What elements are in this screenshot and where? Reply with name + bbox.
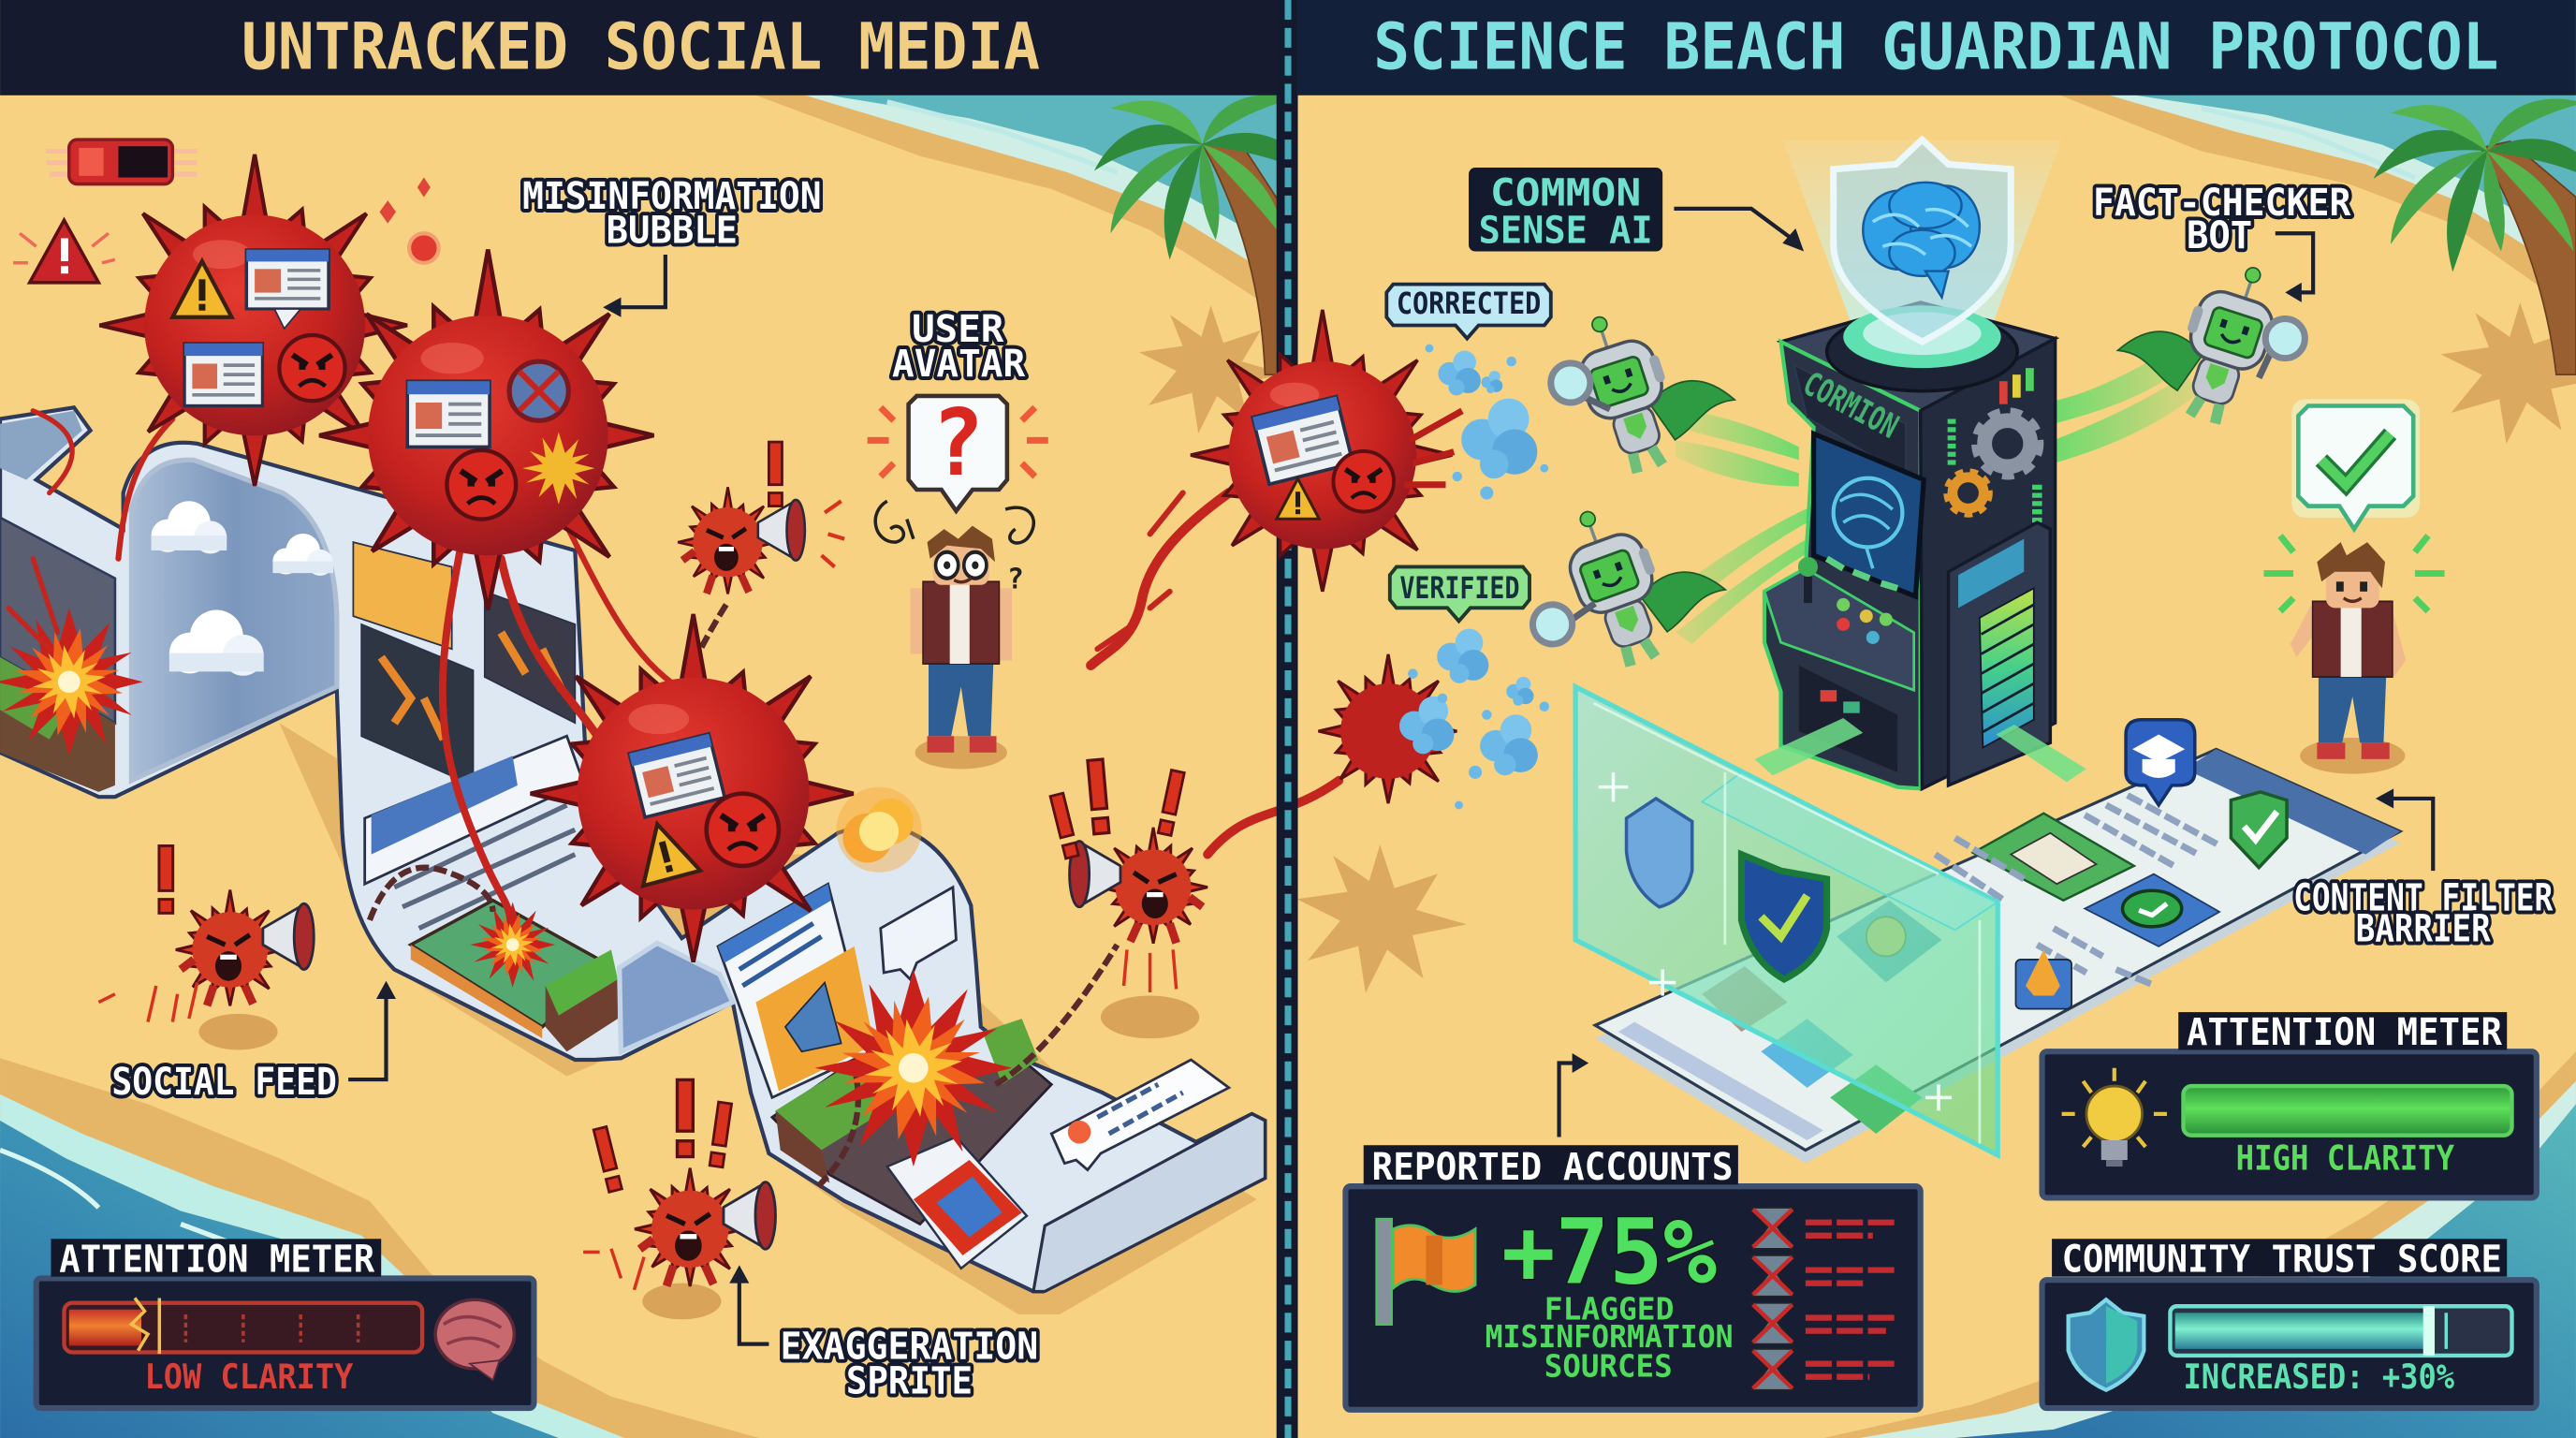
question bubble: ? [931,390,984,497]
barrier blue shield [1627,799,1692,907]
tab label: REPORTED ACCOUNTS [1372,1145,1734,1189]
tablet text lines [1935,795,2217,986]
ribbon front lip [1033,1114,1265,1291]
label: content filter barrier: BARRIER [2356,907,2491,951]
beach: right bottom water [1823,1051,2576,1438]
content tablet [1595,720,2400,1164]
battery icon [46,139,198,184]
holo ring base [1827,305,2017,391]
label: common sense ai: COMMON [1490,170,1641,214]
increased text: INCREASED: +30% [2183,1357,2454,1397]
barrier sparkles [1599,772,1952,1110]
question bubble [868,390,1048,511]
ribbon left card with explosion [0,411,143,792]
machine control panel [1764,557,1914,690]
ribbon cards on the wall [353,542,611,1038]
arcade machine [1764,302,2056,788]
label: misinformation bubble: MISINFORMATION [522,174,822,218]
machine marquee: CORMION [1796,364,1905,447]
tab [2178,1012,2507,1049]
tablet thumbs icon [2015,949,2071,1009]
label: user avatar [892,307,1026,386]
explosion on ribbon [470,902,555,988]
flagged sources text: FLAGGED [1544,1290,1674,1327]
flag icon [1377,1219,1475,1325]
main explosion [815,969,1012,1167]
divider [1277,0,1298,1438]
misinformation bubble 4 [1191,310,1462,592]
panel header right [1298,0,2576,95]
label: content filter barrier [2293,875,2554,951]
user avatar (happy) [2291,542,2406,759]
arrow: reported accounts [1559,1053,1588,1137]
social feed ribbon [0,407,1265,1291]
label: misinformation bubble [522,174,822,253]
arrow: misinformation bubble [603,255,666,317]
arrow: common sense ai [1674,209,1804,252]
label: fact-checker bot: FACT-CHECKER [2093,181,2351,225]
trust bar [2170,1306,2511,1356]
brain icon [435,1299,514,1380]
beach: left bottom water [0,1058,759,1438]
label: common sense ai [1469,168,1662,253]
ribbon second arch [620,943,733,1051]
ribbon arch back wall with clouds [131,460,337,781]
small red decorations [379,178,439,263]
tablet blue check card [2085,874,2219,946]
corrected callout [1386,285,1551,339]
ribbon grass block [546,949,618,1051]
machine screen [1814,433,1924,596]
tab label: ATTENTION METER [2187,1010,2503,1054]
palm tree left [1094,95,1277,375]
dissolving bubble 5 [1319,654,1456,803]
crossed account list [1751,1208,1897,1390]
high bar [2183,1086,2511,1136]
blue particles verified [1408,629,1549,809]
low clarity text: LOW CLARITY [145,1357,354,1397]
flagged sources text: SOURCES [1544,1348,1673,1385]
sprite with megaphone, top [678,442,844,594]
barrier green shield [1741,855,1827,979]
flagged sources text: MISINFORMATION [1486,1318,1734,1355]
ribbon speech bubble [881,888,956,979]
misinformation bubble 1 [99,154,407,486]
ribbon blue image card [887,1137,1027,1269]
palm tree right [2374,99,2576,374]
blue particles corrected [1426,345,1548,500]
corrected callout: CORRECTED [1397,287,1541,321]
label: social feed: SOCIAL FEED [111,1060,337,1104]
attention warning triangle [13,220,115,283]
arrow: fact-checker bot [2276,233,2313,302]
shield icon [2069,1299,2144,1390]
fact-checker bot left bottom [1526,477,1739,674]
label: exaggeration sprite: SPRITE [846,1358,973,1402]
fire burst [836,787,922,873]
tab label: ATTENTION METER [59,1237,375,1281]
tendrils [8,411,1339,945]
machine marquee [1794,364,1906,477]
label: user avatar: AVATAR [892,342,1026,386]
user avatar (confused) [910,526,1012,753]
bulb icon [2062,1068,2167,1167]
flagged sources text [1486,1290,1734,1385]
panel: reported accounts [1345,1145,1921,1410]
confusion squiggles: ? [1007,563,1024,595]
graduation map pin [2126,720,2195,805]
tab label: COMMUNITY TRUST SCORE [2062,1237,2502,1281]
ribbon crater and grass slab [772,1019,1051,1224]
label: fact-checker bot [2093,181,2351,257]
tablet book card [1973,814,2134,901]
machine LEDs and vents [1952,368,2037,529]
machine side panel [1949,522,2050,785]
panel: attention meter low [37,1237,534,1408]
verified callout: VERIFIED [1399,572,1519,606]
+75% figure: +75% [1501,1199,1717,1305]
hologram beam [1782,139,2062,337]
panel: community trust score [2042,1237,2537,1408]
sprite with megaphone, right [1050,759,1208,992]
label: exaggeration sprite: EXAGGERATION [781,1324,1038,1368]
high clarity text: HIGH CLARITY [2236,1138,2455,1179]
sprite with megaphone, left [98,845,314,1022]
check bubble [2291,399,2420,529]
arrow: exaggeration sprite [729,1265,768,1344]
panel: attention meter high [2042,1010,2537,1197]
sprite with megaphone, bottom [583,1079,775,1290]
fact-checker bot right [2106,236,2305,431]
machine gears [1947,413,2039,514]
avatar rays [2263,536,2445,611]
panel header left [0,0,1278,95]
background: left sand [0,0,1288,1438]
beach: right top water [2060,95,2576,312]
chain links [370,605,1117,1186]
misinformation bubble 2 [319,250,653,609]
glass barrier [1575,687,1998,1155]
label: fact-checker bot: BOT [2187,213,2252,257]
label: common sense ai: SENSE AI [1479,209,1653,253]
tab [51,1239,381,1277]
misinformation bubble 3 [531,614,854,962]
title left: UNTRACKED SOCIAL MEDIA [242,10,1040,85]
label: exaggeration sprite [781,1324,1038,1402]
label: user avatar: USER [912,307,1004,351]
title right: SCIENCE BEACH GUARDIAN PROTOCOL [1373,10,2498,85]
tablet small cards [1702,901,1942,1134]
confusion squiggles [875,501,1033,595]
energy trails [1660,348,2202,644]
green beams [1754,718,2086,782]
ribbon white comment bubble [1051,1060,1229,1170]
verified callout [1390,566,1530,621]
machine base [1799,666,1897,772]
fact-checker bot left top [1551,285,1747,480]
background: right sand [1288,0,2576,1438]
tab [1364,1145,1738,1184]
hologram shield with brain [1834,139,2011,342]
green check shield [2231,792,2287,868]
label: misinformation bubble: BUBBLE [607,209,738,253]
beach: left top water [755,95,1278,312]
ribbon megaphone card [718,884,874,1097]
arrow: social feed [348,981,396,1079]
arrow: content filter barrier [2376,788,2433,871]
low bar [65,1298,422,1354]
tab [2052,1239,2507,1277]
scorch marks and sand shadows [91,302,2576,1319]
